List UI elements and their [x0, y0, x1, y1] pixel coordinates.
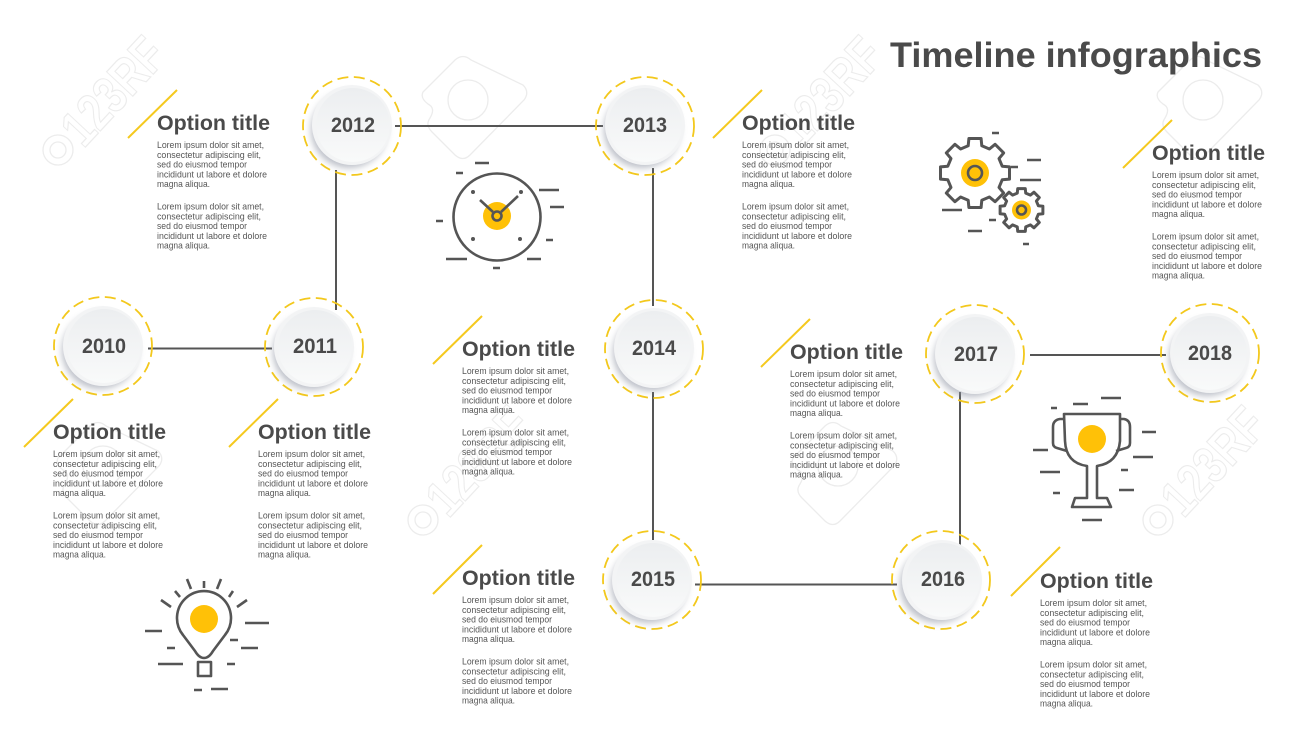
text block: 2015 option: consectetur adipiscing elit,: [462, 666, 566, 676]
text block: 2017 option: sed do eiusmod tempor: [790, 450, 880, 460]
text block: 2012 option: incididunt ut labore et dolore: [157, 170, 267, 180]
text block: 2010 option: [24, 399, 166, 560]
text block: 2016 option: consectetur adipiscing elit,: [1040, 669, 1144, 679]
text block: 2016 option: sed do eiusmod tempor: [1040, 618, 1130, 628]
text block: 2017 option: Lorem ipsum dolor sit amet,: [790, 430, 897, 440]
icon: clock: [436, 163, 564, 268]
text block: 2015 option: consectetur adipiscing elit,: [462, 605, 566, 615]
text block: 2011 option: sed do eiusmod tempor: [258, 469, 348, 479]
text block: 2010 option: Lorem ipsum dolor sit amet,: [53, 449, 160, 459]
watermark: stock logo bottom right: 123RF: [1150, 396, 1277, 527]
text block: 2014 option: magna aliqua.: [462, 467, 515, 477]
text block: 2016 option: [1011, 547, 1153, 709]
watermark: stock logo top left: [27, 26, 177, 181]
text block: 2017 option: Lorem ipsum dolor sit amet,: [790, 369, 897, 379]
milestone 2018: 2018: [1188, 342, 1232, 365]
text block: 2015 option: magna aliqua.: [462, 696, 515, 706]
text block: 2013 option: consectetur adipiscing elit,: [742, 211, 846, 221]
text block: 2011 option: incididunt ut labore et dolore: [258, 478, 368, 488]
text block: 2011 option: consectetur adipiscing elit,: [258, 520, 362, 530]
watermark: stock logo centre: 123RF: [415, 396, 542, 527]
text block: 2013 option: Lorem ipsum dolor sit amet,: [742, 140, 849, 150]
watermark: stock logo centre: [392, 396, 542, 551]
text block: 2012 option: consectetur adipiscing elit,: [157, 150, 261, 160]
text block: 2012 option: [128, 90, 270, 251]
text block: 2013 option: magna aliqua.: [742, 179, 795, 189]
timeline connector lines: [148, 126, 1166, 584]
text block: 2018 option: incididunt ut labore et dolore: [1152, 261, 1262, 271]
text block: 2018 option: magna aliqua.: [1152, 209, 1205, 219]
text block: 2012 option: consectetur adipiscing elit,: [157, 211, 261, 221]
text block: 2012 option: magna aliqua.: [157, 179, 210, 189]
icon: trophy: [1033, 398, 1156, 520]
text block: 2010 option: magna aliqua.: [53, 488, 106, 498]
milestone 2012: [303, 77, 401, 175]
milestone 2013: [596, 77, 694, 175]
text block: 2014 option: [433, 316, 575, 477]
text block: 2018 option: [1123, 120, 1265, 281]
text block: 2014 option: sed do eiusmod tempor: [462, 447, 552, 457]
milestone 2014: [605, 300, 703, 398]
text block: 2016 option: Lorem ipsum dolor sit amet,: [1040, 660, 1147, 670]
text block: 2018 option: sed do eiusmod tempor: [1152, 190, 1242, 200]
text block: 2011 option: sed do eiusmod tempor: [258, 530, 348, 540]
text block: 2011 option: Option title: [258, 421, 371, 444]
milestone 2013: 2013: [623, 114, 667, 137]
text block: 2018 option: consectetur adipiscing elit,: [1152, 241, 1256, 251]
text block: 2018 option: incididunt ut labore et dolore: [1152, 200, 1262, 210]
text block: 2018 option: Option title: [1152, 142, 1265, 165]
icon: gears: [940, 133, 1043, 244]
text block: 2010 option: Lorem ipsum dolor sit amet,: [53, 510, 160, 520]
text block: 2014 option: magna aliqua.: [462, 405, 515, 415]
icon: light bulb: [145, 579, 269, 690]
text block: 2013 option: incididunt ut labore et dolore: [742, 170, 852, 180]
text block: 2013 option: magna aliqua.: [742, 241, 795, 251]
text block: 2010 option: Option title: [53, 421, 166, 444]
text block: 2017 option: consectetur adipiscing elit,: [790, 379, 894, 389]
text block: 2012 option: sed do eiusmod tempor: [157, 221, 247, 231]
text block: 2016 option: sed do eiusmod tempor: [1040, 679, 1130, 689]
milestone 2012: 2012: [331, 114, 375, 137]
text block: 2013 option: consectetur adipiscing elit,: [742, 150, 846, 160]
text block: 2012 option: magna aliqua.: [157, 241, 210, 251]
milestone 2017: [926, 305, 1024, 403]
watermark: stock logo bottom right: [1127, 396, 1277, 551]
milestone 2011: [265, 298, 363, 396]
text block: 2017 option: magna aliqua.: [790, 408, 843, 418]
text block: 2013 option: [713, 90, 855, 251]
text block: 2011 option: Lorem ipsum dolor sit amet,: [258, 449, 365, 459]
text block: 2012 option: incididunt ut labore et dolore: [157, 231, 267, 241]
text block: 2010 option: incididunt ut labore et dolore: [53, 540, 163, 550]
text block: 2015 option: Lorem ipsum dolor sit amet,: [462, 595, 569, 605]
text block: 2010 option: consectetur adipiscing elit,: [53, 459, 157, 469]
text block: 2011 option: consectetur adipiscing elit,: [258, 459, 362, 469]
milestone 2014: 2014: [632, 337, 676, 360]
text block: 2014 option: sed do eiusmod tempor: [462, 386, 552, 396]
text block: 2013 option: Lorem ipsum dolor sit amet,: [742, 202, 849, 212]
text block: 2014 option: Option title: [462, 338, 575, 361]
text block: 2017 option: [761, 319, 903, 480]
text block: 2015 option: [433, 545, 575, 706]
milestone 2015: 2015: [631, 568, 675, 591]
milestone 2011: 2011: [293, 335, 337, 358]
text block: 2018 option: sed do eiusmod tempor: [1152, 251, 1242, 261]
text block: 2015 option: sed do eiusmod tempor: [462, 615, 552, 625]
watermark: stock logo top centre: [744, 26, 894, 181]
milestone 2016: [892, 531, 990, 629]
text block: 2010 option: magna aliqua.: [53, 550, 106, 560]
milestone 2010: [54, 297, 152, 395]
text block: 2018 option: consectetur adipiscing elit,: [1152, 180, 1256, 190]
text block: 2017 option: incididunt ut labore et dolore: [790, 460, 900, 470]
text block: 2016 option: Lorem ipsum dolor sit amet,: [1040, 598, 1147, 608]
text block: 2012 option: Lorem ipsum dolor sit amet,: [157, 140, 264, 150]
text block: 2014 option: consectetur adipiscing elit,: [462, 376, 566, 386]
text block: 2013 option: Option title: [742, 112, 855, 135]
text block: 2014 option: consectetur adipiscing elit,: [462, 437, 566, 447]
text block: 2017 option: consectetur adipiscing elit,: [790, 440, 894, 450]
text block: 2013 option: sed do eiusmod tempor: [742, 160, 832, 170]
text block: 2012 option: sed do eiusmod tempor: [157, 160, 247, 170]
text block: 2013 option: incididunt ut labore et dolore: [742, 231, 852, 241]
text block: 2013 option: sed do eiusmod tempor: [742, 221, 832, 231]
text block: 2012 option: Lorem ipsum dolor sit amet,: [157, 202, 264, 212]
text block: 2017 option: magna aliqua.: [790, 470, 843, 480]
watermark: stock logo top centre: 123RF: [767, 26, 894, 157]
text block: 2018 option: magna aliqua.: [1152, 271, 1205, 281]
text block: 2011 option: Lorem ipsum dolor sit amet,: [258, 510, 365, 520]
text block: 2010 option: sed do eiusmod tempor: [53, 469, 143, 479]
milestone 2015: [603, 531, 701, 629]
milestone 2018: [1161, 304, 1259, 402]
watermark: camera mark centre top: [422, 56, 527, 158]
text block: 2015 option: Option title: [462, 567, 575, 590]
text block: 2016 option: Option title: [1040, 570, 1153, 593]
watermark: camera mark top right: [1157, 56, 1262, 158]
text block: 2017 option: Option title: [790, 341, 903, 364]
text block: 2014 option: incididunt ut labore et dolore: [462, 396, 572, 406]
text block: 2015 option: incididunt ut labore et dolore: [462, 686, 572, 696]
text block: 2016 option: magna aliqua.: [1040, 699, 1093, 709]
text block: 2011 option: incididunt ut labore et dolore: [258, 540, 368, 550]
text block: 2015 option: Lorem ipsum dolor sit amet,: [462, 656, 569, 666]
text block: 2016 option: magna aliqua.: [1040, 637, 1093, 647]
text block: 2018 option: Lorem ipsum dolor sit amet,: [1152, 232, 1259, 242]
text block: 2011 option: [229, 399, 371, 560]
title: Timeline infographics: [890, 35, 1262, 75]
text block: 2016 option: consectetur adipiscing elit,: [1040, 608, 1144, 618]
watermark: stock logo top left: 123RF: [50, 26, 177, 157]
text block: 2015 option: magna aliqua.: [462, 634, 515, 644]
text block: 2014 option: Lorem ipsum dolor sit amet,: [462, 428, 569, 438]
text block: 2012 option: Option title: [157, 112, 270, 135]
watermark: camera mark lower left: [57, 422, 162, 524]
text block: 2014 option: incididunt ut labore et dolore: [462, 457, 572, 467]
milestone 2010: 2010: [82, 335, 126, 358]
text block: 2010 option: sed do eiusmod tempor: [53, 530, 143, 540]
milestone 2017: 2017: [954, 343, 998, 366]
text block: 2014 option: Lorem ipsum dolor sit amet,: [462, 366, 569, 376]
text block: 2018 option: Lorem ipsum dolor sit amet,: [1152, 170, 1259, 180]
text block: 2017 option: sed do eiusmod tempor: [790, 389, 880, 399]
milestone 2016: 2016: [921, 568, 965, 591]
text block: 2010 option: incididunt ut labore et dolore: [53, 478, 163, 488]
text block: 2010 option: consectetur adipiscing elit,: [53, 520, 157, 530]
text block: 2016 option: incididunt ut labore et dolore: [1040, 628, 1150, 638]
text block: 2015 option: sed do eiusmod tempor: [462, 676, 552, 686]
text block: 2011 option: magna aliqua.: [258, 550, 311, 560]
watermark: camera mark lower centre: [792, 422, 897, 524]
text block: 2015 option: incididunt ut labore et dolore: [462, 624, 572, 634]
text block: 2017 option: incididunt ut labore et dolore: [790, 398, 900, 408]
text block: 2016 option: incididunt ut labore et dolore: [1040, 689, 1150, 699]
text block: 2011 option: magna aliqua.: [258, 488, 311, 498]
